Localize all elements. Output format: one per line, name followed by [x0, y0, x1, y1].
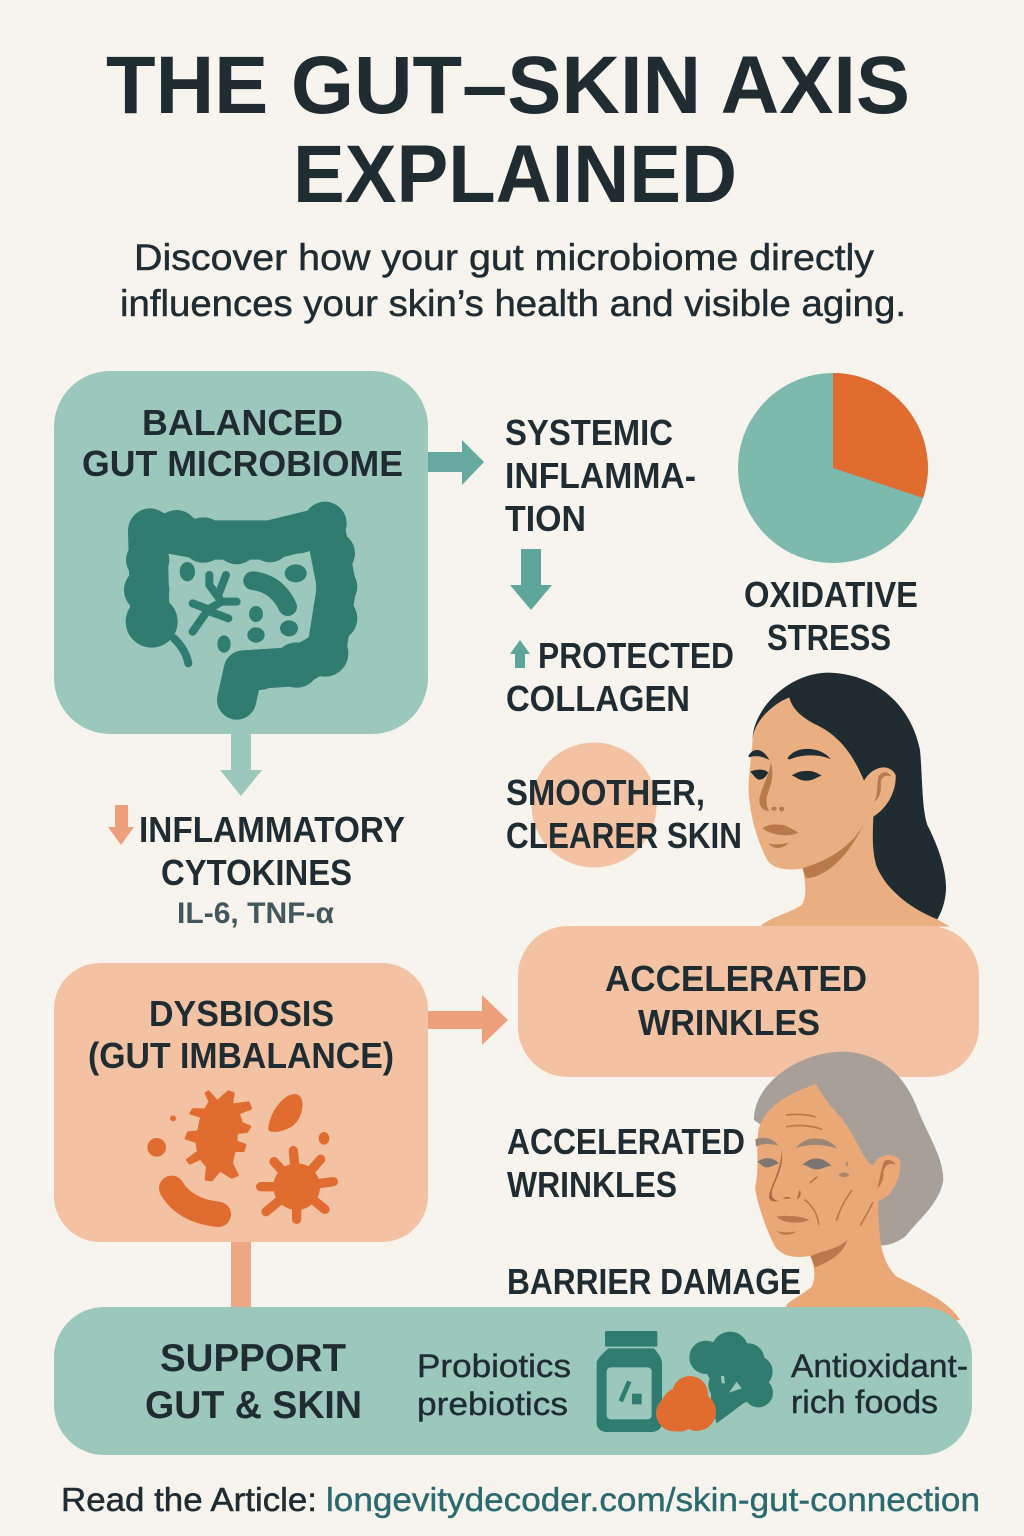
subtitle: influences your skin’s health and visible aging. [120, 283, 906, 324]
footer: article link: Read the Article: [61, 1481, 317, 1518]
heading: dysbiosis: DYSBIOSIS [149, 993, 334, 1034]
heading: dysbiosis: (GUT IMBALANCE) [88, 1035, 394, 1076]
text: antioxidant-rich foods: Antioxidant- [791, 1348, 968, 1384]
text: inflammatory cytokines: INFLAMMATORY [139, 809, 405, 850]
heading: support gut and skin: GUT & SKIN [145, 1384, 362, 1427]
icon: small up arrow [510, 640, 530, 668]
arrow: inflammation down [510, 549, 552, 610]
heading: support gut and skin [145, 1337, 362, 1427]
panel: accelerated wrinkles: WRINKLES [638, 1002, 820, 1043]
label: oxidative stress: STRESS [767, 617, 891, 658]
text: antioxidant-rich foods [791, 1348, 968, 1420]
label: oxidative stress: OXIDATIVE [744, 574, 918, 615]
subtitle: Discover how your gut microbiome directly [134, 237, 875, 278]
heading: balanced gut microbiome: GUT MICROBIOME [82, 443, 403, 484]
text: systemic inflammation: TION [505, 498, 586, 539]
text: protected collagen [506, 635, 734, 719]
text: accelerated wrinkles: WRINKLES [507, 1164, 677, 1205]
arrow: dysbiosis to wrinkles [428, 995, 508, 1045]
text: inflammatory cytokines: IL-6, TNF-α [177, 897, 335, 930]
heading: support gut and skin: SUPPORT [160, 1337, 346, 1380]
text: smoother, clearer skin: SMOOTHER, [506, 772, 705, 813]
text: inflammatory cytokines: CYTOKINES [161, 852, 352, 893]
footer: article link [61, 1481, 980, 1518]
icon: small down arrow [108, 805, 134, 845]
text: protected collagen: COLLAGEN [506, 678, 690, 719]
icon: supplement jar [597, 1331, 662, 1432]
text: accelerated wrinkles: ACCELERATED [507, 1121, 745, 1162]
text: inflammatory cytokines [139, 809, 405, 930]
icon: broccoli and orange food [656, 1332, 773, 1432]
text: probiotics prebiotics [417, 1348, 571, 1422]
panel: support gut and skin [54, 1307, 972, 1455]
text: antioxidant-rich foods: rich foods [791, 1384, 938, 1420]
panel: dysbiosis [54, 963, 428, 1242]
title: EXPLAINED [293, 129, 737, 220]
panel: accelerated wrinkles: ACCELERATED [605, 958, 867, 999]
label: oxidative stress [744, 574, 918, 658]
icon: intestine with microbes [124, 502, 357, 716]
arrow: gut down to cytokines [220, 734, 262, 796]
text: probiotics prebiotics: Probiotics [417, 1348, 571, 1384]
text: probiotics prebiotics: prebiotics [417, 1386, 568, 1422]
panel: balanced gut microbiome [54, 371, 428, 734]
text: systemic inflammation: SYSTEMIC [505, 412, 673, 453]
footer: article link: longevitydecoder.com/skin-gut-connection [326, 1481, 980, 1518]
arrow: gut to systemic inflammation [428, 440, 484, 485]
text: accelerated wrinkles [507, 1121, 745, 1205]
illustration: older woman [754, 1052, 960, 1333]
title: THE GUT–SKIN AXIS [106, 40, 910, 131]
title [106, 40, 910, 220]
circle: behind smoother skin [532, 742, 656, 868]
text: smoother, clearer skin: CLEARER SKIN [506, 815, 742, 856]
heading: balanced gut microbiome [82, 402, 403, 484]
heading: dysbiosis [88, 993, 394, 1076]
text: barrier damage: BARRIER DAMAGE [507, 1261, 801, 1302]
pie chart: oxidative stress [738, 373, 928, 563]
illustration: young woman [748, 673, 950, 927]
subtitle [120, 237, 906, 324]
text: smoother, clearer skin [506, 772, 742, 856]
panel: accelerated wrinkles [518, 926, 979, 1077]
heading: balanced gut microbiome: BALANCED [142, 402, 343, 443]
text: systemic inflammation: INFLAMMA- [505, 455, 696, 496]
icon: harmful bacteria [147, 1092, 333, 1219]
connector: dysbiosis to support panel [231, 1242, 251, 1308]
text: systemic inflammation [505, 412, 696, 539]
text: protected collagen: PROTECTED [538, 635, 734, 676]
